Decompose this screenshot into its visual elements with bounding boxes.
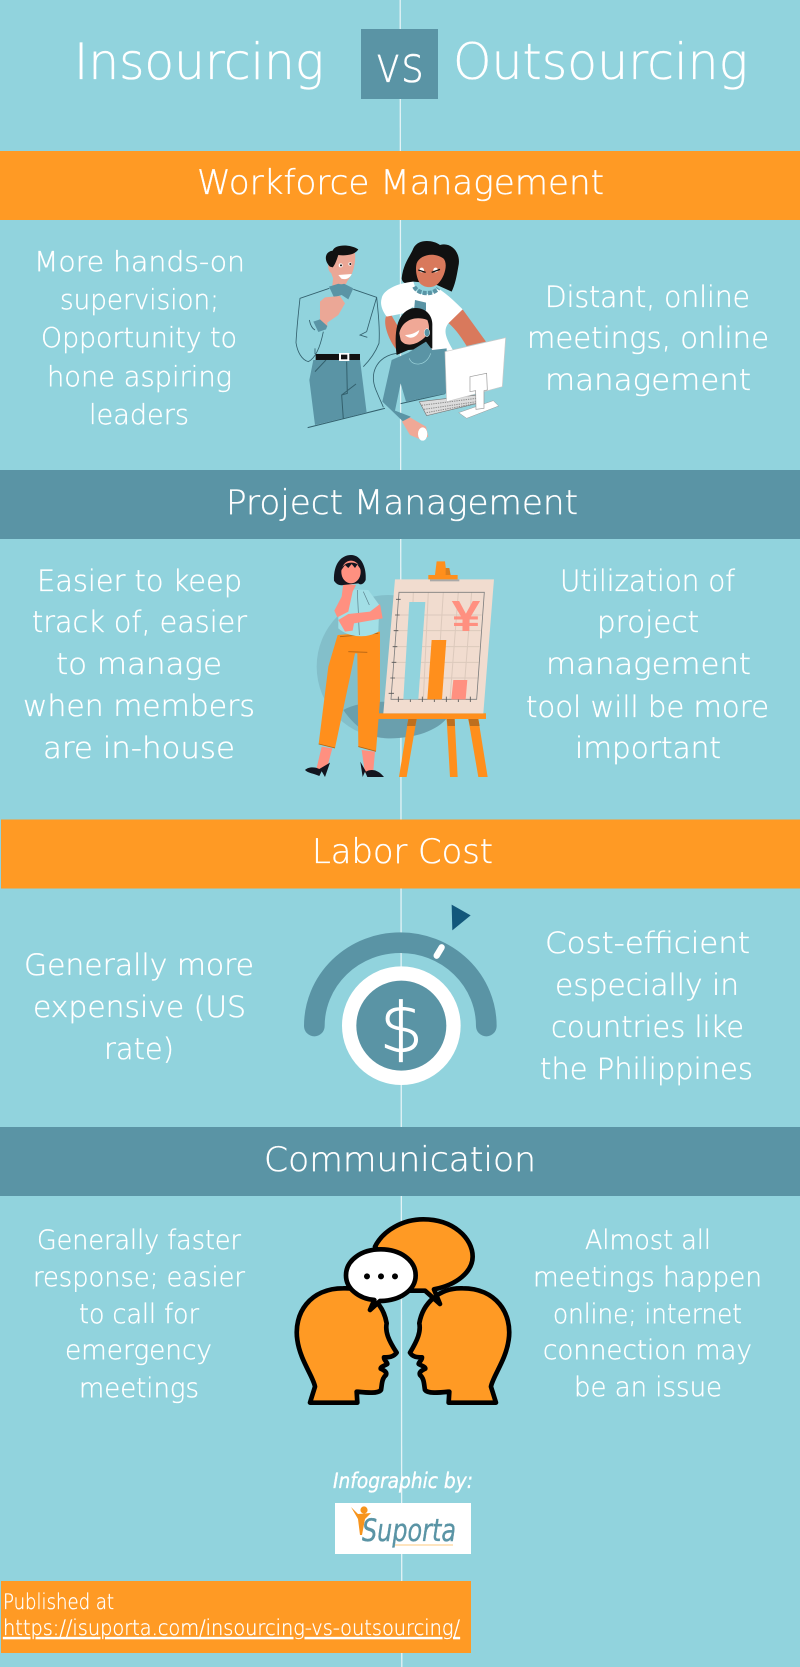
woman standing <box>381 241 486 352</box>
text: labor cost outsourcing: Cost-efficient <box>545 926 750 960</box>
text: project insourcing: Easier to keep <box>37 564 242 598</box>
heading band: Project Management: Project Management <box>226 483 578 523</box>
heading band: Workforce Management: Workforce Management <box>197 163 604 203</box>
text: project outsourcing: project <box>597 605 699 639</box>
text: project outsourcing: tool will be more <box>526 690 769 724</box>
logo: iSuporta: Suporta <box>362 1513 456 1549</box>
text: communication insourcing: to call for <box>79 1299 199 1330</box>
woman seated <box>373 308 447 441</box>
text: communication outsourcing: be an issue <box>574 1372 722 1403</box>
text: labor cost outsourcing <box>540 926 753 1086</box>
dollar coin: $ <box>380 990 423 1069</box>
text: project outsourcing: management <box>546 647 751 681</box>
illustration: woman and chart on easel <box>305 555 494 777</box>
large speech bubble <box>375 1219 473 1304</box>
text: workforce outsourcing: management <box>545 363 751 397</box>
text: communication outsourcing: connection may <box>543 1335 752 1366</box>
gauge pointer <box>452 905 471 930</box>
desk line <box>308 394 445 428</box>
heading band: Workforce Management <box>0 151 800 220</box>
gauge arc <box>314 943 486 1026</box>
text: labor cost outsourcing: countries like <box>551 1010 744 1044</box>
text: communication outsourcing: Almost all <box>585 1225 711 1256</box>
text: labor cost insourcing <box>24 948 254 1066</box>
text: project insourcing: track of, easier <box>32 605 247 639</box>
heading band: Labor Cost: Labor Cost <box>312 832 493 872</box>
text: workforce insourcing: leaders <box>89 399 189 431</box>
text: project outsourcing: important <box>575 731 721 765</box>
text: project insourcing: are in-house <box>43 731 235 765</box>
text: labor cost insourcing: rate) <box>104 1032 174 1066</box>
publication note <box>1 1581 471 1653</box>
title: Outsourcing <box>453 33 748 91</box>
text: project insourcing: to manage <box>56 647 222 681</box>
text: workforce insourcing <box>34 246 245 431</box>
publication note: https://isuporta.com/insourcing-vs-outsourcing/ <box>3 1616 460 1640</box>
text: project insourcing <box>23 564 255 765</box>
right head <box>410 1288 509 1403</box>
man <box>296 245 379 425</box>
credit text: Infographic by: <box>333 1469 473 1493</box>
gauge tick <box>437 947 442 956</box>
text: project outsourcing <box>526 564 769 765</box>
text: project outsourcing: Utilization of <box>560 564 736 598</box>
logo: iSuporta <box>335 1503 471 1554</box>
text: communication outsourcing: online; internet <box>553 1299 742 1330</box>
backdrop circle <box>317 595 460 738</box>
illustration: three coworkers at a computer <box>296 241 506 441</box>
text: communication outsourcing <box>533 1225 762 1403</box>
text: labor cost insourcing: Generally more <box>24 948 254 982</box>
text: communication insourcing <box>33 1225 245 1404</box>
text: project insourcing: when members <box>23 689 255 723</box>
text: labor cost insourcing: expensive (US <box>33 990 246 1024</box>
woman <box>305 555 384 777</box>
heading band: Project Management <box>0 470 800 539</box>
text: communication insourcing: emergency <box>65 1335 212 1366</box>
computer <box>419 338 506 418</box>
publication note: Published at <box>3 1590 114 1614</box>
left head <box>297 1288 397 1403</box>
text: workforce outsourcing <box>527 280 769 397</box>
chart <box>389 592 484 702</box>
chart: ¥ <box>452 593 480 641</box>
text: workforce insourcing: Opportunity to <box>41 322 237 354</box>
heading band: Communication: Communication <box>264 1140 536 1180</box>
text: communication insourcing: meetings <box>79 1373 199 1404</box>
text: workforce insourcing: More hands-on <box>34 246 245 278</box>
icon: cost gauge with dollar sign <box>314 905 486 1085</box>
text: labor cost outsourcing: especially in <box>555 968 739 1002</box>
text: communication insourcing: Generally faster <box>37 1225 241 1256</box>
dollar coin <box>342 966 461 1085</box>
text: workforce insourcing: supervision; <box>60 284 219 316</box>
text: labor cost outsourcing: the Philippines <box>540 1052 753 1086</box>
small speech bubble <box>346 1249 416 1310</box>
text: communication insourcing: response; easier <box>33 1262 245 1293</box>
text: workforce insourcing: hone aspiring <box>47 361 232 393</box>
heading band: Labor Cost <box>1 820 800 888</box>
easel <box>378 561 494 777</box>
text: workforce outsourcing: Distant, online <box>545 280 750 314</box>
text: communication outsourcing: meetings happen <box>533 1262 762 1293</box>
title: vs <box>375 36 424 94</box>
text: workforce outsourcing: meetings, online <box>527 321 769 355</box>
title <box>74 29 748 99</box>
title: Insourcing <box>74 33 324 91</box>
icon: two heads talking <box>297 1219 509 1403</box>
heading band: Communication <box>0 1127 800 1196</box>
